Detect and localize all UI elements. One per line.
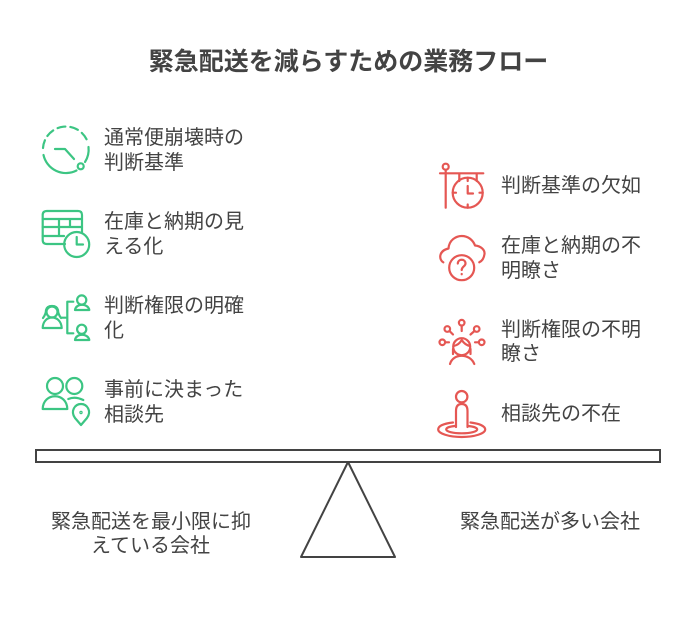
text: 在庫と納期の見える化: 在庫と納期の見 bbox=[104, 210, 244, 233]
text line 2: 相談先 bbox=[104, 403, 164, 426]
text line 2: 判断基準 bbox=[104, 151, 184, 174]
text: 判断基準の欠如: 判断基準の欠如 bbox=[501, 174, 641, 197]
icon: person standing on target bbox=[438, 391, 485, 437]
icon: hanging clock sign bbox=[440, 164, 483, 208]
icon: dashed circle with clock hand bbox=[43, 127, 89, 173]
text line 2: 明瞭さ bbox=[501, 259, 561, 282]
text: 通常便崩壊時の判断基準: 通常便崩壊時の bbox=[104, 126, 244, 149]
text: 緊急配送を最小限に抑えている会社: 緊急配送を最小限に抑 bbox=[51, 510, 251, 533]
text: 緊急配送が多い会社: 緊急配送が多い会社 bbox=[460, 510, 640, 533]
text: 相談先の不在: 相談先の不在 bbox=[501, 402, 621, 425]
text: 判断権限の不明瞭さ: 判断権限の不明 bbox=[501, 318, 641, 341]
icon: table with clock bbox=[43, 211, 89, 257]
seesaw fulcrum bbox=[301, 462, 395, 557]
icon: people hierarchy bbox=[43, 295, 89, 340]
icon: two people with location pin bbox=[43, 378, 89, 425]
text line 2: える化 bbox=[104, 235, 163, 258]
text line 2: 化 bbox=[104, 319, 124, 342]
text line 2: 瞭さ bbox=[501, 342, 541, 365]
text: 判断権限の明確化: 判断権限の明確 bbox=[104, 294, 244, 317]
text: 在庫と納期の不明瞭さ: 在庫と納期の不 bbox=[501, 234, 641, 257]
seesaw beam bbox=[36, 450, 660, 462]
text: 事前に決まった相談先: 事前に決まった bbox=[104, 378, 243, 401]
icon: person with radiating nodes bbox=[440, 320, 485, 364]
title: 緊急配送を減らすための業務フロー bbox=[149, 48, 548, 76]
text line 2: えている会社 bbox=[91, 534, 210, 557]
icon: cloud with question mark bbox=[440, 236, 485, 280]
